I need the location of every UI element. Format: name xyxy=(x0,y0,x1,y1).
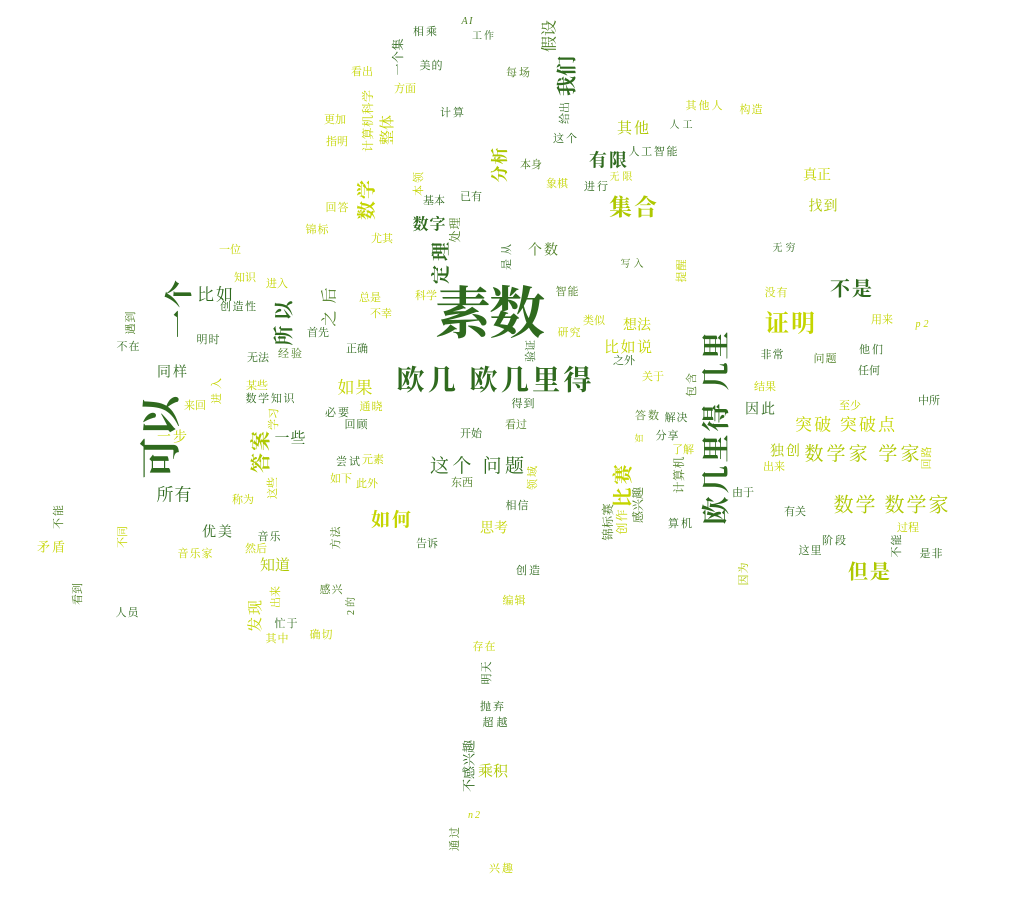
word: 正确: 正确 xyxy=(346,341,368,355)
word: 方面: 方面 xyxy=(394,81,416,95)
word: 一个集: 一个集 xyxy=(390,38,405,76)
word: 分析: 分析 xyxy=(490,148,510,182)
word: 智能: 智能 xyxy=(556,284,578,298)
word: 如下: 如下 xyxy=(330,472,352,485)
word: 通晓: 通晓 xyxy=(360,399,382,413)
word: 出来 (vertical): 出来 xyxy=(268,586,282,608)
word: 不能: 不能 xyxy=(51,505,65,529)
word: 元素: 元素 xyxy=(362,452,384,466)
word: 整体: 整体 xyxy=(378,115,396,145)
word: 问题: 问题 xyxy=(814,351,836,365)
word: 可以: 可以 xyxy=(138,392,184,478)
word: 证明: 证明 xyxy=(765,311,815,338)
word: 欧几 欧几里得: 欧几 欧几里得 xyxy=(396,364,592,396)
word: 没有: 没有 xyxy=(764,286,788,299)
word: 不在: 不在 xyxy=(116,339,140,353)
word: 任何: 任何 xyxy=(858,363,880,377)
word: 看到: 看到 xyxy=(70,583,84,605)
word: 定理: 定理 xyxy=(430,242,452,284)
word: 这个: 这个 xyxy=(553,132,577,145)
word: 经验: 经验 xyxy=(278,346,302,360)
word: 方法: 方法 xyxy=(328,526,342,550)
word: 一位: 一位 xyxy=(219,243,241,256)
word: 验证: 验证 xyxy=(523,340,537,362)
word: 知识: 知识 xyxy=(234,271,257,284)
word: 学习: 学习 xyxy=(267,408,280,430)
word: 不幸: 不幸 xyxy=(370,306,392,320)
word: 无限: 无限 xyxy=(610,171,632,183)
word: 集合: 集合 xyxy=(609,195,657,220)
word: 优美: 优美 xyxy=(202,523,232,540)
word: 数学家 学家: 数学家 学家 xyxy=(804,443,920,465)
word: 基本: 基本 xyxy=(423,193,445,207)
word: 由于: 由于 xyxy=(732,485,754,499)
word: 一步: 一步 xyxy=(157,428,187,445)
word: 算机: 算机 xyxy=(668,516,692,530)
word: 首先: 首先 xyxy=(307,325,329,339)
word: 进行: 进行 xyxy=(584,179,608,193)
word: 遇到: 遇到 xyxy=(123,312,137,334)
word: 回路: 回路 xyxy=(920,446,933,470)
word: p2: p2 xyxy=(914,319,928,330)
word: 2的: 2的 xyxy=(345,597,357,615)
word: 一个: 一个 xyxy=(163,280,195,338)
word: 是从: 是从 xyxy=(500,244,513,270)
word: 我们: 我们 xyxy=(555,56,578,96)
word: 相乘: 相乘 xyxy=(413,24,437,38)
word: 个数: 个数 xyxy=(528,241,558,258)
word: 比如: 比如 xyxy=(197,286,233,305)
word: 因此: 因此 xyxy=(745,401,775,417)
word: 这些: 这些 xyxy=(265,477,279,499)
word: 假设: 假设 xyxy=(541,20,559,52)
word: 告诉: 告诉 xyxy=(416,536,438,550)
word: 开始: 开始 xyxy=(460,426,483,440)
word: 确切: 确切 xyxy=(310,627,332,641)
word: 回顾: 回顾 xyxy=(344,418,368,431)
word: 是非: 是非 xyxy=(920,546,942,560)
word: 想法: 想法 xyxy=(623,316,652,333)
word: 所以: 所以 xyxy=(271,298,295,346)
word: 更加: 更加 xyxy=(324,112,346,126)
word: 明时: 明时 xyxy=(196,332,220,346)
word: 处理: 处理 xyxy=(447,218,462,242)
word: 进入: 进入 xyxy=(266,276,288,290)
word: 抛弃: 抛弃 xyxy=(480,699,504,713)
word: 如果: 如果 xyxy=(338,379,372,398)
word: 科学: 科学 xyxy=(415,288,437,302)
word: 知道: 知道 xyxy=(260,557,290,574)
word: 然后: 然后 xyxy=(245,542,267,555)
word: 兴趣: 兴趣 xyxy=(489,861,513,875)
word: 通过: 通过 xyxy=(447,827,461,851)
word: 编辑: 编辑 xyxy=(502,593,526,607)
word: 计算: 计算 xyxy=(440,105,464,119)
word: 人员: 人员 xyxy=(116,606,140,619)
word: 因为: 因为 xyxy=(736,562,750,586)
word: 本领: 本领 xyxy=(411,171,425,196)
word: 有限: 有限 xyxy=(589,150,627,170)
word: 给出: 给出 xyxy=(557,102,571,124)
word: 得到: 得到 xyxy=(512,396,534,410)
word: 至少: 至少 xyxy=(839,398,861,412)
word: 如: 如 xyxy=(634,433,644,444)
word: 创造性: 创造性 xyxy=(220,299,256,313)
word: 结果: 结果 xyxy=(754,379,776,393)
word: 指明: 指明 xyxy=(326,134,348,148)
word: 超越: 超越 xyxy=(482,715,508,729)
word: 忙于: 忙于 xyxy=(274,616,298,630)
word: 进入 (vertical): 进入 xyxy=(209,378,223,404)
word: 中所: 中所 xyxy=(918,393,940,407)
word: 来回: 来回 xyxy=(184,398,206,412)
word: 音乐: 音乐 xyxy=(258,529,282,543)
word: 答案: 答案 xyxy=(248,431,272,473)
word: 不同: 不同 xyxy=(116,526,129,548)
word: 思考: 思考 xyxy=(480,519,508,536)
word: 数字: 数字 xyxy=(412,215,446,234)
word: 计算机科学: 计算机科学 xyxy=(360,90,375,152)
word: 尤其: 尤其 xyxy=(371,231,394,245)
word: 比赛: 比赛 xyxy=(610,462,634,508)
word: 这个问题: 这个 问题 xyxy=(430,455,524,477)
word: 出来: 出来 xyxy=(763,459,785,473)
word: 本身: 本身 xyxy=(520,157,542,171)
word: 非常: 非常 xyxy=(760,347,784,361)
word: 此外: 此外 xyxy=(356,476,379,490)
word: 其他人: 其他人 xyxy=(686,98,722,112)
word: 无法: 无法 xyxy=(247,350,270,364)
word: 写入: 写入 xyxy=(620,257,644,270)
word: 有关: 有关 xyxy=(784,505,806,518)
word: 每场: 每场 xyxy=(506,65,530,79)
word: 找到: 找到 xyxy=(808,197,838,214)
word: 回答: 回答 xyxy=(326,201,348,214)
word: 尝试: 尝试 xyxy=(336,454,360,468)
word: 计算机: 计算机 xyxy=(671,456,686,494)
word: 某些: 某些 xyxy=(246,378,268,392)
word: 数学 数学家: 数学 数学家 xyxy=(834,493,948,516)
word: 音乐家: 音乐家 xyxy=(178,546,212,560)
word: 他们: 他们 xyxy=(859,342,883,356)
word: 独创: 独创 xyxy=(770,442,800,459)
word: 不是: 不是 xyxy=(830,277,872,300)
word: 数学知识: 数学知识 xyxy=(246,391,296,405)
word: 乘积: 乘积 xyxy=(478,763,509,780)
word: 美的: 美的 xyxy=(420,59,442,72)
word: 如何: 如何 xyxy=(371,509,411,531)
word: 人工: 人工 xyxy=(670,118,692,131)
word: 其中: 其中 xyxy=(266,631,288,645)
word: 之外: 之外 xyxy=(613,353,636,367)
word: 关于: 关于 xyxy=(642,370,664,383)
word: 相信: 相信 xyxy=(506,498,528,512)
word: 创造: 创造 xyxy=(516,563,540,577)
word: 看出: 看出 xyxy=(351,64,373,78)
word: 同样: 同样 xyxy=(157,363,187,380)
word: 研究: 研究 xyxy=(558,325,580,339)
word: 其他: 其他 xyxy=(617,119,649,137)
word: 构造: 构造 xyxy=(740,102,762,116)
word: 看过: 看过 xyxy=(505,417,527,431)
word: 包含: 包含 xyxy=(684,373,698,397)
word: 但是: 但是 xyxy=(848,560,890,583)
word: 素数: 素数 xyxy=(435,284,545,346)
word: 所有: 所有 xyxy=(156,486,192,505)
word: 之后: 之后 xyxy=(321,288,339,326)
word: 提醒: 提醒 xyxy=(674,260,688,282)
word: 工作: 工作 xyxy=(472,29,494,42)
word: 象棋: 象棋 xyxy=(546,176,569,190)
word: 必要: 必要 xyxy=(325,406,349,419)
word: 真正: 真正 xyxy=(803,166,831,183)
word: 发现: 发现 xyxy=(247,600,264,632)
word: 不感兴趣: 不感兴趣 xyxy=(461,740,476,792)
word: 不能 (right): 不能 xyxy=(889,534,903,558)
word: 类似: 类似 xyxy=(583,313,606,327)
word: 数学 (vertical): 数学 xyxy=(356,180,378,220)
word: 领域: 领域 xyxy=(525,466,539,490)
word: 感兴: 感兴 xyxy=(320,582,344,596)
word: 答数: 答数 xyxy=(635,408,659,422)
word: 比如说: 比如说 xyxy=(604,339,652,356)
word: 锦标赛: 锦标赛 xyxy=(600,504,615,540)
word: 已有: 已有 xyxy=(460,190,482,203)
word: 了解: 了解 xyxy=(672,442,694,456)
word: 称为: 称为 xyxy=(232,492,254,506)
word: n2: n2 xyxy=(468,810,480,821)
word: 无穷: 无穷 xyxy=(772,241,796,254)
word: 一些: 一些 xyxy=(274,430,306,447)
word: 这里: 这里 xyxy=(798,544,822,557)
word: 人工智能: 人工智能 xyxy=(628,144,678,158)
word: 存在: 存在 xyxy=(472,639,496,653)
word: 创作: 创作 xyxy=(614,510,629,534)
word: 突破 突破点: 突破 突破点 xyxy=(795,415,896,435)
word: AI: AI xyxy=(460,16,473,27)
word: 欧几里得 几里: 欧几里得 几里 xyxy=(700,332,732,524)
word: 解决: 解决 xyxy=(664,410,688,424)
word: 明天: 明天 xyxy=(480,662,493,684)
word: 矛盾: 矛盾 xyxy=(37,539,65,554)
word: 阶段: 阶段 xyxy=(822,534,846,547)
word: 用来: 用来 xyxy=(871,312,893,326)
word: 过程: 过程 xyxy=(897,520,919,534)
word: 锦标: 锦标 xyxy=(306,222,330,236)
word: 分享: 分享 xyxy=(656,428,678,442)
word: 总是: 总是 xyxy=(359,291,381,304)
word: 感兴趣: 感兴趣 xyxy=(630,487,645,523)
word: 东西: 东西 xyxy=(451,476,473,489)
